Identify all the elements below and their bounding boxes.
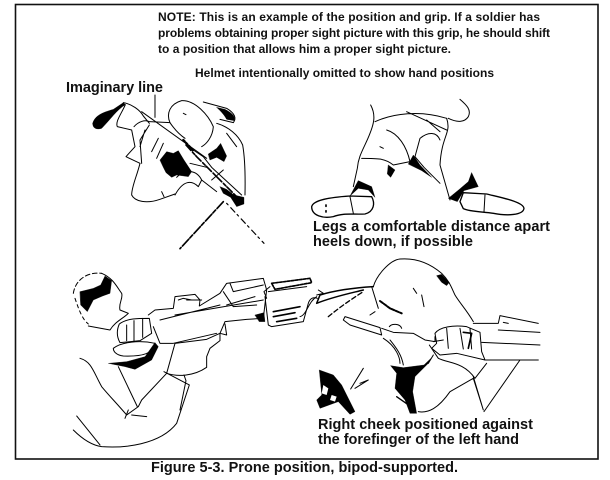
note text: problems obtaining proper sight picture with this grip, he should shift <box>158 26 550 40</box>
note text <box>158 10 550 56</box>
illustration: legs and boots <box>312 99 524 217</box>
label: cheek <box>318 417 533 448</box>
note text: to a position that allows him a proper sight picture. <box>158 42 451 56</box>
figure caption: Figure 5-3. Prone position, bipod-supported. <box>151 460 458 476</box>
illustration: gunner profile holding machine gun <box>73 273 317 447</box>
label: cheek: Right cheek positioned against <box>318 417 533 433</box>
label: legs: heels down, if possible <box>313 234 473 250</box>
label: cheek: the forefinger of the left hand <box>318 432 519 448</box>
illustration: prone soldier front view with bipod <box>93 95 264 249</box>
illustration: close-up of cheek on hand <box>300 259 540 414</box>
note text: NOTE: This is an example of the position and grip. If a soldier has <box>158 10 540 24</box>
label: legs <box>313 219 550 250</box>
label: legs: Legs a comfortable distance apart <box>313 219 550 235</box>
helmet note: Helmet intentionally omitted to show hand positions <box>195 66 494 80</box>
label: imaginary line: Imaginary line <box>66 80 163 96</box>
